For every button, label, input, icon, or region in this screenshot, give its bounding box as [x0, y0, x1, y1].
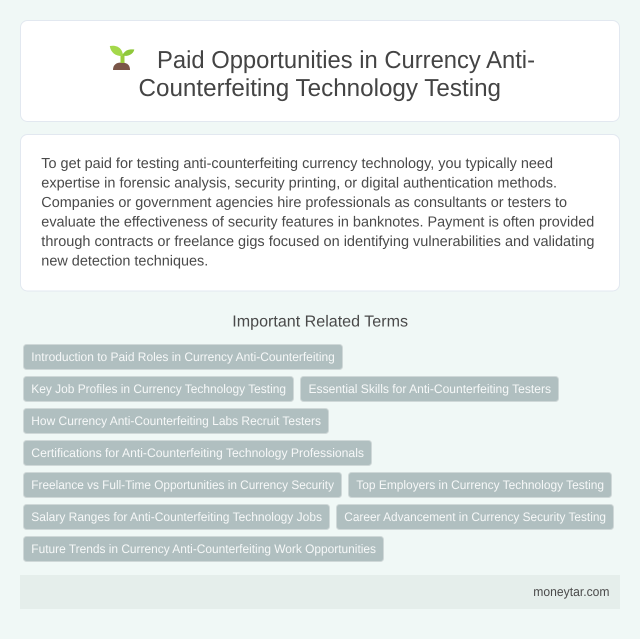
- panel: related term tags: [24, 344, 614, 562]
- description paragraph: expertise in forensic analysis, security printing, or digital authentication methods.: [41, 176, 557, 192]
- title text: Paid Opportunities in Currency Anti-: [157, 47, 535, 74]
- tag: freelance vs full-time: [24, 472, 342, 498]
- tag: certifications: [24, 440, 372, 466]
- description paragraph: [41, 156, 595, 270]
- tag: lab recruiting: How Currency Anti-Counterfeiting Labs Recruit Testers: [31, 414, 321, 428]
- description paragraph: To get paid for testing anti-counterfeiting currency technology, you typically need: [41, 156, 553, 172]
- footer bar: [20, 575, 620, 609]
- tag: top employers: [348, 472, 612, 498]
- tag: introduction: [24, 344, 342, 370]
- panel: title card: [20, 20, 620, 122]
- tag: certifications: Certifications for Anti-Counterfeiting Technology Professionals: [31, 446, 364, 460]
- title text: [138, 47, 535, 102]
- tag: job profiles: [24, 376, 294, 402]
- description paragraph: new detection techniques.: [41, 254, 208, 270]
- description paragraph: evaluate the effectiveness of security features in banknotes. Payment is often provided: [41, 214, 594, 230]
- footer source text: moneytar.com: [533, 584, 610, 599]
- tag: salary ranges: [24, 504, 330, 530]
- description paragraph: through contracts or freelance gigs focused on identifying vulnerabilities and validating: [41, 234, 595, 250]
- heading: related terms: Important Related Terms: [232, 314, 408, 330]
- tag: essential skills: [300, 376, 558, 402]
- tag: essential skills: Essential Skills for Anti-Counterfeiting Testers: [308, 382, 551, 396]
- tag: future trends: [24, 536, 384, 562]
- tag: future trends: Future Trends in Currency Anti-Counterfeiting Work Opportunities: [31, 542, 376, 556]
- description paragraph: Companies or government agencies hire professionals as consultants or testers to: [41, 195, 567, 211]
- tag: lab recruiting: [24, 408, 328, 434]
- tag: job profiles: Key Job Profiles in Currency Technology Testing: [31, 382, 286, 396]
- title text: Counterfeiting Technology Testing: [138, 75, 501, 102]
- tag: salary ranges: Salary Ranges for Anti-Counterfeiting Technology Jobs: [31, 510, 322, 524]
- tag: career advancement: [336, 504, 614, 530]
- icon: seedling: [110, 46, 134, 70]
- tag: career advancement: Career Advancement in Currency Security Testing: [344, 510, 606, 524]
- tag: freelance vs full-time: Freelance vs Full-Time Opportunities in Currency Security: [31, 478, 335, 492]
- panel: description card: [20, 134, 620, 291]
- tag: introduction: Introduction to Paid Roles in Currency Anti-Counterfeiting: [31, 350, 335, 364]
- tag: top employers: Top Employers in Currency Technology Testing: [356, 478, 604, 492]
